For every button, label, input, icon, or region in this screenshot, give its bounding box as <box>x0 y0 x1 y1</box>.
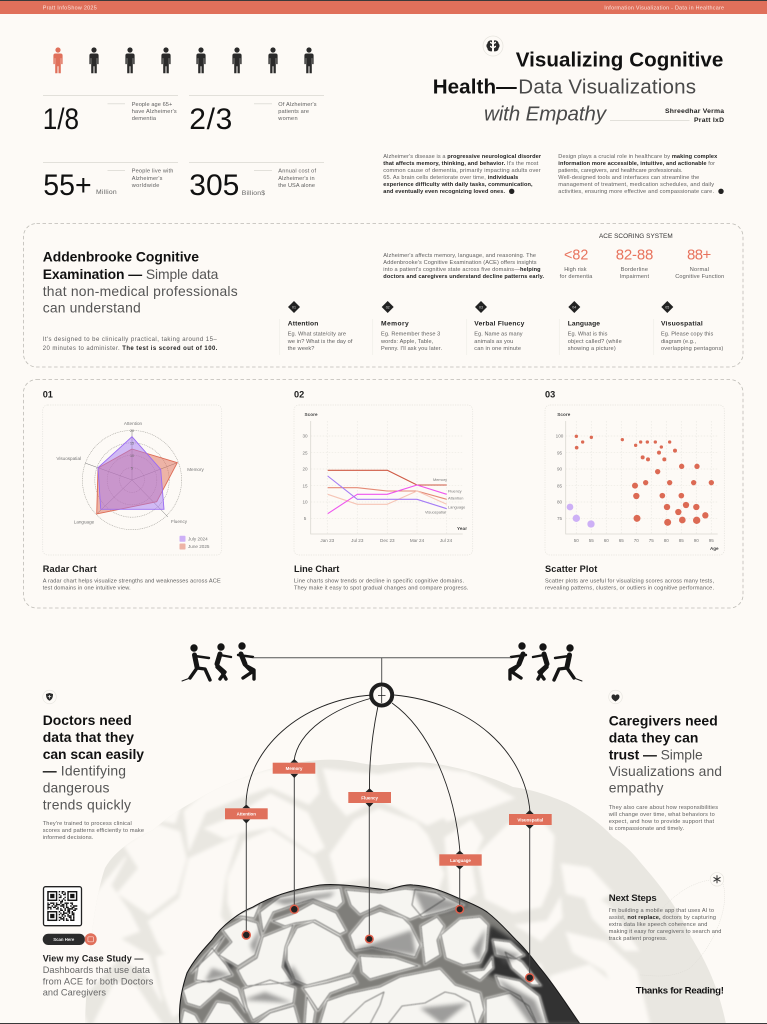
domain: Attention <box>287 301 353 352</box>
text: caregivers need: They also care about how responsibilities <box>609 805 718 811</box>
text: ACE overview: into a patient's cognitive state across five domains—helping <box>383 267 541 273</box>
intro text: Alzheimer's disease: experience difficulty with daily tasks, communication, <box>383 182 533 188</box>
text: doctors need: trends quickly <box>43 796 131 812</box>
radar chart: A radar chart helps visualize strengths and weaknesses across ACE <box>43 578 221 584</box>
text: doctors need <box>43 712 144 841</box>
domain: Verbal Fluency: 03 <box>479 305 483 309</box>
scatter plot: 75 <box>649 538 654 543</box>
intro text: role of design: patients, caregivers, and healthcare professionals. <box>558 168 683 174</box>
domain: Verbal Fluency: animals as you <box>474 339 513 345</box>
line chart: They make it easy to spot gradual changes and compare progress. <box>294 586 469 592</box>
ACE scoring system: Borderline <box>621 267 648 273</box>
domain: Memory: 02 <box>386 305 390 309</box>
intro text: Alzheimer's disease: Alzheimer's disease is a progressive neurological disorder <box>383 154 542 160</box>
domain: Attention: Attention <box>288 321 318 328</box>
stat: 55+ million: 55+ <box>43 169 92 202</box>
text: caregivers need: empathy <box>609 780 663 796</box>
panel: chart types <box>24 380 743 608</box>
QR code <box>44 887 82 926</box>
domain: Visuospatial: overlapping pentagons) <box>661 346 723 352</box>
domain: Verbal Fluency: Eg. Name as many <box>474 332 523 338</box>
stat: 305 billion: the USA alone <box>278 183 315 189</box>
title: Data Visualizations <box>518 75 696 98</box>
tag: Language: Language <box>450 858 471 863</box>
panel: Addenbrooke Cognitive Examination <box>24 224 743 367</box>
domain: Visuospatial <box>661 301 723 352</box>
stat: 55+ million <box>43 162 178 202</box>
ACE scoring system: for dementia <box>560 274 593 280</box>
top banner <box>0 0 767 14</box>
ACE scoring system: ACE SCORING SYSTEM <box>599 233 673 240</box>
tag: Memory <box>273 759 315 778</box>
line chart: Line Chart <box>294 564 339 574</box>
intro text: Alzheimer's disease <box>383 154 542 195</box>
text: view case study: View my Case Study — <box>43 954 143 964</box>
intro text: Alzheimer's disease: that affects memory, thinking, and behavior. It's the most <box>383 161 539 167</box>
icon: doctors shield <box>43 690 56 704</box>
domain: Language: Language <box>568 321 600 328</box>
line chart: Year <box>457 526 467 531</box>
text: next steps: Next Steps <box>609 893 657 904</box>
line chart: 10 <box>302 500 308 505</box>
domain: Memory: Penny. I'll ask you later. <box>381 346 442 352</box>
radar chart: 15 <box>130 442 134 446</box>
scatter plot: 95 <box>709 538 714 543</box>
stat: 1/8: dementia <box>132 116 157 122</box>
text: next steps: I'm building a mobile app that uses AI to <box>609 908 714 914</box>
radar chart: Memory <box>187 467 204 472</box>
text: doctors need: — Identifying <box>43 763 126 779</box>
text: view case study <box>43 954 154 997</box>
text: caregivers need: expect, and how to provide support that <box>609 819 714 825</box>
author credit: Pratt IxD <box>694 117 724 124</box>
radar chart: Visuospatial <box>56 456 81 461</box>
top banner: Pratt InfoShow 2025 <box>43 5 97 11</box>
line chart: Score <box>304 412 318 417</box>
scatter plot: Score <box>557 412 571 417</box>
legend: June 2025 <box>188 544 210 549</box>
text: test duration <box>43 337 218 352</box>
intro text: role of design: activities, ensuring more effective and compassionate care. <box>558 189 714 195</box>
heading: ACE <box>43 249 238 316</box>
text: view case study: from ACE for both Doctors <box>43 976 154 986</box>
line chart: Mar 24 <box>410 538 425 543</box>
text: doctors need: dangerous <box>43 779 109 795</box>
brain target markers <box>242 905 534 982</box>
line chart: Fluency <box>448 488 462 494</box>
line chart: Jul 24 <box>440 538 453 543</box>
ACE scoring system: Normal <box>690 267 709 273</box>
scatter plot: 90 <box>694 538 699 543</box>
domain: Visuospatial: 05 <box>665 305 669 309</box>
text: next steps: track patient progress. <box>609 936 668 942</box>
stat: 55+ million: Million <box>96 189 117 196</box>
stat: 305 billion: Billion$ <box>242 190 265 197</box>
scatter plot: 85 <box>679 538 684 543</box>
line chart: 5 <box>304 516 307 521</box>
domain: Memory: Eg. Remember these 3 <box>381 332 440 338</box>
tag: Fluency: Fluency <box>361 795 378 800</box>
text: ACE overview: doctors and caregivers understand decline patterns early. <box>383 274 544 280</box>
scatter plot: revealing patterns, clusters, or outliers in cognitive performance. <box>545 586 714 592</box>
scatter plot: 65 <box>619 538 624 543</box>
tag: Language <box>439 850 482 870</box>
line chart: 15 <box>302 483 308 488</box>
scatter plot: 55 <box>589 538 594 543</box>
intro text: role of design: management of treatment, medication schedules, and daily <box>558 182 714 188</box>
stat: 305 billion: 305 <box>189 169 239 202</box>
line chart: Language <box>448 504 465 509</box>
stat: 2/3 <box>189 96 324 136</box>
domain: Memory: words: Apple, Table, <box>380 339 434 345</box>
domain: Memory: Memory <box>381 321 409 328</box>
scatter plot: Scatter plots are useful for visualizing scores across many tests, <box>545 578 714 584</box>
scatter plot: Age <box>710 546 719 551</box>
domain: Visuospatial: Eg. Please copy this <box>661 332 714 338</box>
closing note: Thanks for Reading! <box>636 986 724 997</box>
line chart: Memory <box>433 477 447 482</box>
text: view case study: and Caregivers <box>43 987 106 997</box>
stat: 1/8: People age 65+ <box>132 102 172 108</box>
radar chart: Language <box>74 520 95 525</box>
text: next steps: assist, not replace, doctors by capturing <box>609 915 716 921</box>
intro text: Alzheimer's disease: common cause of dementia, primarily impacting adults over <box>383 168 541 174</box>
scan here button <box>43 933 97 945</box>
faint background brain illustration <box>56 755 730 1024</box>
ACE scoring system: <82 <box>564 246 588 263</box>
title <box>433 48 723 126</box>
line chart <box>294 390 473 592</box>
domain: Language <box>568 301 622 352</box>
domain: Verbal Fluency <box>474 301 525 352</box>
author credit <box>610 108 724 124</box>
radar chart: test domains in one intuitive view. <box>43 586 131 592</box>
stat: 2/3: women <box>277 116 298 122</box>
scatter plot: 75 <box>557 516 562 521</box>
domain: Language: object called? (while <box>568 339 622 345</box>
text: caregivers need: is compassionate and timely. <box>609 826 684 832</box>
heading: ACE: that non-medical professionals <box>43 283 238 299</box>
radar chart: 10 <box>130 454 134 458</box>
ACE scoring system: Cognitive Function <box>675 274 724 280</box>
line chart: Attention <box>448 496 463 501</box>
scatter plot: 03 <box>545 390 555 400</box>
text: doctors need: can scan easily <box>43 746 144 762</box>
line chart: Line charts show trends or decline in specific cognitive domains. <box>294 578 464 584</box>
domain: Attention: we in? What is the day of <box>287 339 353 345</box>
domain: Visuospatial: Visuospatial <box>661 321 703 328</box>
stat: 55+ million: People live with <box>132 168 173 174</box>
text: next steps <box>609 893 721 942</box>
heading: ACE: can understand <box>43 300 141 316</box>
stat: 55+ million: worldwide <box>131 183 159 189</box>
stat: 2/3: 2/3 <box>189 103 232 136</box>
tag: Fluency <box>348 788 391 807</box>
tag: Attention: Attention <box>237 812 256 816</box>
stat: 305 billion <box>189 162 324 202</box>
line chart: 20 <box>302 467 308 472</box>
scatter plot <box>545 390 724 592</box>
text: caregivers need: will change over time, what behaviors to <box>608 812 715 818</box>
author credit: Shreedhar Verma <box>665 108 724 115</box>
connector arcs <box>246 695 530 852</box>
title: Health— <box>433 75 517 98</box>
icon: caregivers heart <box>609 690 622 704</box>
tag: Visuospatial <box>509 810 552 829</box>
ACE scoring system: Impairment <box>620 274 649 280</box>
domain: Attention: Eg. What state/city are <box>288 332 346 338</box>
icon: central brain hub <box>371 684 392 706</box>
domain: Verbal Fluency: can in one minute <box>474 346 521 352</box>
tag: Visuospatial: Visuospatial <box>517 817 543 822</box>
title: Visualizing Cognitive <box>516 48 723 71</box>
rope <box>253 658 511 684</box>
domain: Attention: the week? <box>288 346 314 352</box>
text: test duration: It's designed to be clinically practical, taking around 15– <box>43 337 217 343</box>
radar chart: Fluency <box>171 519 188 524</box>
heading: ACE: Addenbrooke Cognitive <box>43 249 199 265</box>
ACE scoring system <box>560 233 724 280</box>
scatter plot: Scatter Plot <box>545 564 597 574</box>
stat: 305 billion: Annual cost of <box>278 168 316 174</box>
intro text: role of design: Well-designed tools and interfaces can streamline the <box>558 175 699 181</box>
scatter plot: 80 <box>664 538 669 543</box>
scatter plot: 60 <box>604 538 609 543</box>
text: doctors need: data that they <box>43 729 134 745</box>
line chart: Visuospatial <box>425 509 446 514</box>
text: next steps: extra data like speech coherence and <box>609 922 707 928</box>
leader lines <box>246 774 530 978</box>
intro text: role of design <box>558 154 724 195</box>
radar chart: 5 <box>131 466 133 470</box>
scatter plot: 85 <box>557 483 562 488</box>
intro text: Alzheimer's disease: and eventually even recognizing loved ones. <box>383 189 505 195</box>
ACE scoring system: High risk <box>564 267 587 273</box>
scatter plot: 80 <box>557 500 562 505</box>
text: doctors need: informed decisions. <box>43 835 94 841</box>
text: doctors need: Doctors need <box>43 712 132 728</box>
radar chart: Radar Chart <box>43 564 97 574</box>
text: caregivers need: Caregivers need <box>609 713 718 729</box>
stat: 55+ million: Alzheimer's <box>132 176 163 182</box>
detailed brain illustration <box>175 880 585 1024</box>
line chart: 30 <box>302 434 308 439</box>
text: ACE overview <box>383 253 544 280</box>
scatter plot: 95 <box>557 450 562 455</box>
title: with Empathy <box>484 103 608 126</box>
text: doctors need: They're trained to process clinical <box>43 821 132 827</box>
scatter plot: 100 <box>556 434 564 439</box>
radar chart: 20 <box>130 429 134 433</box>
text: caregivers need <box>608 713 722 832</box>
tag: Memory: Memory <box>286 766 303 771</box>
icon: next steps snowflake <box>640 872 725 976</box>
text: caregivers need: trust — Simple <box>609 746 703 762</box>
heading: ACE: Examination — Simple data <box>43 266 219 282</box>
scatter plot: 70 <box>634 538 639 543</box>
tag: Attention <box>225 804 268 824</box>
pictogram: 1 in 8 people <box>53 47 314 73</box>
intro text: Alzheimer's disease: 65. As brain cells deteriorate over time, individuals <box>383 175 518 181</box>
domain: Visuospatial: diagram (e.g., <box>661 339 696 345</box>
scatter plot: 50 <box>574 538 579 543</box>
icon: brain badge <box>483 36 503 56</box>
radar chart <box>43 390 222 592</box>
text: caregivers need: data they can <box>609 730 698 746</box>
top banner: Information Visualization - Data in Healthcare <box>604 5 724 11</box>
stat: 2/3: patients are <box>278 109 309 115</box>
radar chart: 01 <box>43 390 53 400</box>
stat: 2/3: Of Alzheimer's <box>278 102 317 108</box>
line chart: Jan 23 <box>320 538 335 543</box>
text: next steps: making it easy for caregivers to search and <box>609 929 721 935</box>
domain: Attention: 01 <box>292 305 296 309</box>
intro text: role of design: Design plays a crucial role in healthcare by making complex <box>558 154 718 160</box>
text: ACE overview: Addenbrooke's Cognitive Examination (ACE) offers insights <box>383 260 537 266</box>
domain: Language: 04 <box>572 305 576 309</box>
stat: 1/8 <box>43 96 178 136</box>
radar chart: Attention <box>124 421 143 426</box>
text: ACE overview: Alzheimer's affects memory, language, and reasoning. The <box>383 253 536 259</box>
domain: Memory <box>380 301 442 352</box>
line chart: Jul 23 <box>351 538 364 543</box>
line chart: Dec 23 <box>380 538 395 543</box>
ACE scoring system: 82-88 <box>616 246 653 263</box>
text: doctors need: scores and patterns efficiently to make <box>43 828 144 834</box>
text: test duration: 20 minutes to administer. The test is scored out of 100. <box>43 346 218 352</box>
stat: 305 billion: Alzheimer's in <box>278 176 315 182</box>
stat: 1/8: have Alzheimer's <box>132 109 177 115</box>
scan here button: Scan Here <box>53 937 75 942</box>
stat: 1/8: 1/8 <box>43 103 79 136</box>
legend: July 2024 <box>188 536 208 542</box>
domain: Language: showing a picture) <box>568 346 616 352</box>
text: view case study: Dashboards that use data <box>43 965 151 975</box>
ACE scoring system: 88+ <box>687 246 712 263</box>
line chart: 02 <box>294 390 304 400</box>
tug of war: right team <box>510 642 582 681</box>
legend <box>180 536 210 550</box>
line chart: 25 <box>302 450 308 455</box>
intro text: role of design: information more accessible, intuitive, and actionable for <box>558 161 715 167</box>
scatter plot: 90 <box>557 467 562 472</box>
domain: Language: Eg. What is this <box>568 332 608 338</box>
text: caregivers need: Visualizations and <box>609 763 722 779</box>
domain: Verbal Fluency: Verbal Fluency <box>474 321 525 328</box>
tug of war: left team <box>182 642 254 681</box>
